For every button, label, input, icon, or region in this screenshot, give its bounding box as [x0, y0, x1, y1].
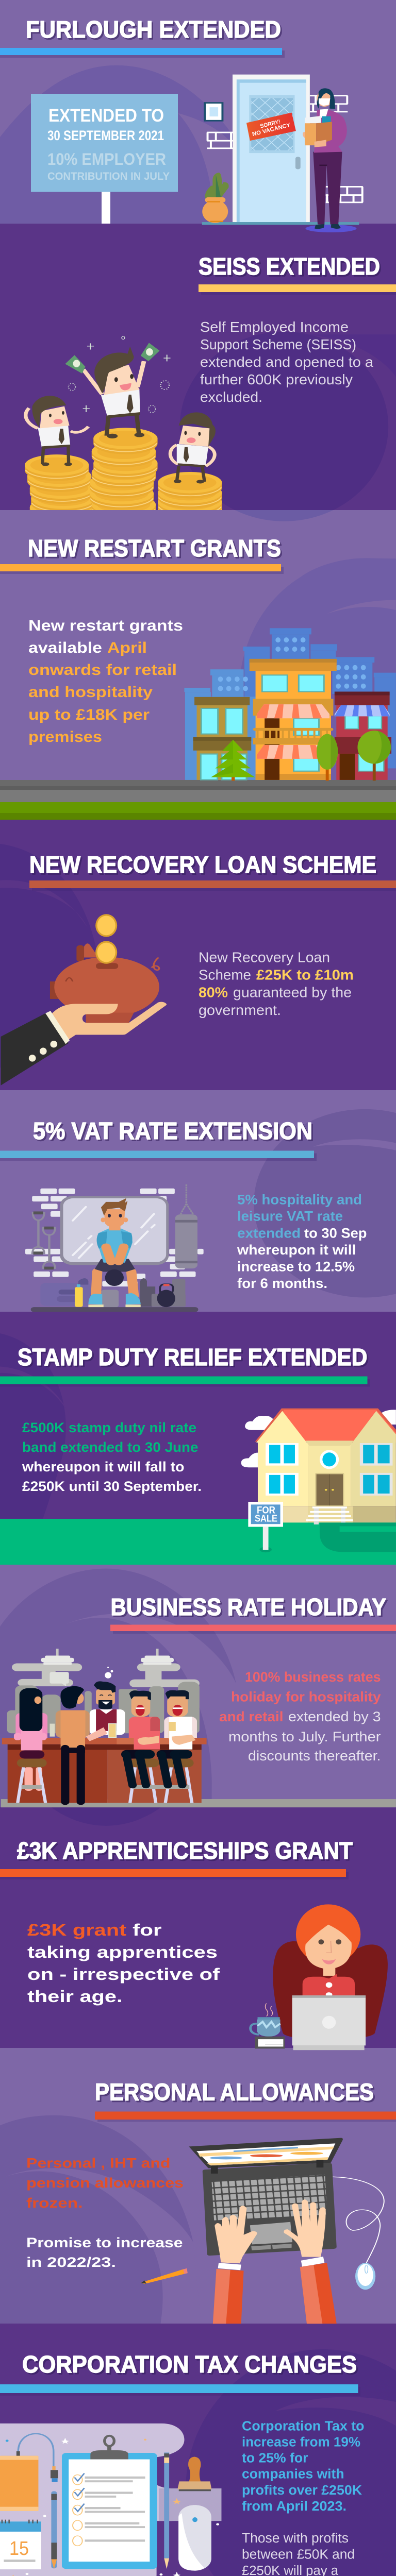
- text: business rates description: extended by 3: [288, 1709, 381, 1724]
- illustration: man in gym: [25, 1184, 204, 1312]
- text: personal allowances description: frozen.: [26, 2195, 82, 2211]
- text: business rates description: [219, 1669, 381, 1764]
- illustration: three men on coin stacks: [25, 336, 222, 524]
- signboard: 10% EMPLOYER: [47, 150, 166, 168]
- text: SEISS description: Support Scheme (SEISS): [200, 336, 356, 352]
- panel: SEISS extended: [25, 253, 396, 524]
- illustration: door and woman with box: [202, 75, 363, 232]
- text: personal allowances description: pension allowances: [26, 2175, 184, 2191]
- text: SEISS description: excluded.: [200, 389, 262, 405]
- text: apprenticeship grant description: on - irrespective of: [27, 1965, 220, 1984]
- panel: business rate holiday: [0, 1568, 396, 1826]
- panel: stamp duty relief extended: [0, 1333, 396, 1565]
- illustration: woman with laptop: [251, 1904, 388, 2050]
- text: recovery loan description: £25K to £10m: [256, 967, 354, 983]
- text: stamp duty description: band extended to 30 June: [22, 1439, 198, 1455]
- illustration: house for sale: FOR: [257, 1505, 275, 1516]
- text: SEISS description: further 600K previously: [200, 371, 353, 387]
- illustration: house for sale: SALE: [255, 1514, 277, 1524]
- text: VAT description: [237, 1192, 367, 1291]
- text: corporation tax description: from April 2023.: [242, 2499, 346, 2514]
- text: personal allowances description: in 2022/23.: [26, 2255, 116, 2270]
- text: corporation tax description: Those with profits: [242, 2531, 349, 2546]
- heading: 5% VAT rate extension: 5% VAT RATE EXTENSION: [33, 1117, 312, 1144]
- text: restart grants description: available: [28, 639, 102, 656]
- text: VAT description: extended: [237, 1225, 301, 1241]
- text: stamp duty description: whereupon it will fall to: [22, 1459, 185, 1475]
- illustration: clipboard and desk items: 15: [9, 2538, 29, 2560]
- text: apprenticeship grant description: taking apprentices: [27, 1943, 218, 1961]
- text: corporation tax description: increase from 19%: [242, 2435, 360, 2449]
- text: recovery loan description: New Recovery Loan: [199, 949, 330, 965]
- panel: £3K apprenticeships grant: [0, 1837, 388, 2050]
- text: corporation tax description: to 25% for: [242, 2451, 308, 2466]
- text: SEISS description: extended and opened to a: [200, 354, 373, 370]
- panel: furlough extended: [0, 16, 363, 232]
- text: personal allowances description: Personal , IHT and: [26, 2156, 170, 2171]
- heading: stamp duty relief extended: STAMP DUTY RELIEF EXTENDED: [18, 1344, 367, 1370]
- panel: personal allowances: [0, 2078, 396, 2332]
- text: corporation tax description: profits over £250K: [242, 2483, 362, 2498]
- text: VAT description: leisure VAT rate: [237, 1209, 343, 1224]
- signboard: CONTRIBUTION IN JULY: [47, 171, 170, 182]
- text: business rates description: discounts thereafter.: [248, 1748, 381, 1764]
- heading: furlough extended: FURLOUGH EXTENDED: [26, 16, 281, 43]
- panel: new restart grants: [0, 535, 396, 820]
- illustration: door and woman with box: SORRY!: [259, 118, 281, 130]
- text: personal allowances description: [26, 2156, 184, 2270]
- illustration: house for sale: [241, 1409, 396, 1552]
- text: recovery loan description: government.: [199, 1002, 281, 1018]
- text: business rates description: 100% business rates: [245, 1669, 381, 1685]
- text: VAT description: for 6 months.: [237, 1276, 327, 1291]
- text: stamp duty description: [22, 1420, 202, 1494]
- illustration: people at a bar: [1, 1649, 396, 1807]
- text: apprenticeship grant description: for: [133, 1921, 162, 1939]
- heading: personal allowances: PERSONAL ALLOWANCES: [95, 2078, 374, 2105]
- panel: 5% VAT rate extension: [0, 1109, 396, 1312]
- text: business rates description: months to July. Further: [228, 1729, 381, 1744]
- text: corporation tax description: [242, 2419, 364, 2576]
- text: apprenticeship grant description: their age.: [27, 1987, 123, 2006]
- text: apprenticeship grant description: [27, 1921, 220, 2006]
- signboard: EXTENDED TO: [48, 106, 164, 126]
- text: restart grants description: onwards for retail: [28, 662, 177, 679]
- text: personal allowances description: Promise to increase: [26, 2235, 183, 2250]
- text: apprenticeship grant description: £3K grant: [27, 1921, 126, 1939]
- text: VAT description: 5% hospitality and: [237, 1192, 362, 1208]
- text: VAT description: to 30 Sep: [304, 1225, 367, 1241]
- heading: new recovery loan scheme: NEW RECOVERY LOAN SCHEME: [29, 851, 376, 878]
- text: SEISS description: Self Employed Income: [200, 319, 349, 335]
- text: corporation tax description: companies with: [242, 2467, 344, 2481]
- heading: new restart grants: NEW RESTART GRANTS: [28, 535, 281, 562]
- illustration: clipboard and desk items: [0, 2424, 221, 2576]
- panel: new recovery loan scheme: [0, 844, 396, 1086]
- illustration: road and grass: [0, 780, 396, 820]
- text: restart grants description: up to £18K per: [28, 706, 150, 723]
- signboard: 30 SEPTEMBER 2021: [47, 128, 164, 143]
- illustration: door and woman with box: NO VACANCY: [252, 122, 291, 138]
- text: restart grants description: and hospitality: [28, 684, 153, 701]
- text: restart grants description: New restart grants: [28, 617, 183, 634]
- text: business rates description: and retail: [219, 1709, 284, 1724]
- text: business rates description: holiday for hospitality: [231, 1689, 381, 1704]
- signboard: [31, 94, 178, 224]
- text: restart grants description: April: [107, 639, 147, 656]
- text: restart grants description: [28, 617, 183, 745]
- heading: corporation tax changes: CORPORATION TAX CHANGES: [22, 2351, 357, 2378]
- panel: corporation tax changes: [0, 2349, 396, 2576]
- heading: £3K apprenticeships grant: £3K APPRENTICESHIPS GRANT: [17, 1837, 353, 1864]
- text: restart grants description: premises: [28, 728, 102, 745]
- text: corporation tax description: between £50K and: [242, 2547, 355, 2562]
- illustration: shops and city skyline: [184, 628, 396, 781]
- text: stamp duty description: £250K until 30 September.: [22, 1479, 202, 1494]
- text: recovery loan description: Scheme: [199, 967, 251, 983]
- text: corporation tax description: Corporation Tax to: [242, 2419, 364, 2434]
- text: stamp duty description: £500K stamp duty nil rate: [22, 1420, 196, 1435]
- illustration: hands on laptop with mouse: [141, 2138, 384, 2324]
- text: recovery loan description: [199, 949, 354, 1018]
- text: recovery loan description: guaranteed by the: [233, 984, 352, 1001]
- text: SEISS description: [200, 319, 373, 405]
- text: VAT description: whereupon it will: [237, 1242, 356, 1258]
- illustration: piggy bank on hand: [1, 914, 167, 1086]
- text: recovery loan description: 80%: [199, 984, 228, 1001]
- text: VAT description: increase to 12.5%: [237, 1259, 355, 1275]
